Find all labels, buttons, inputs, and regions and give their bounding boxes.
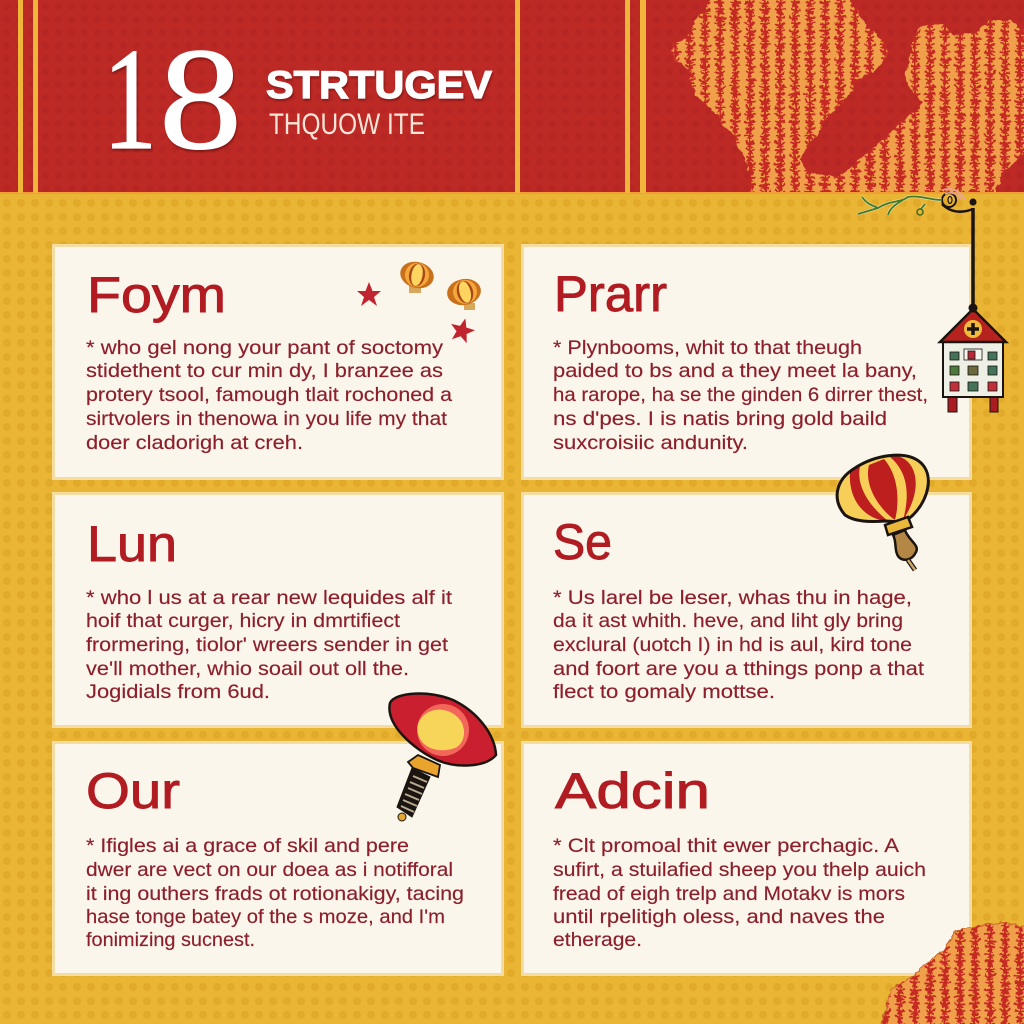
title heading: STRTUGEV — [266, 64, 492, 107]
text block: Foym body: sirtvolers in thenowa in you life my that — [86, 408, 448, 430]
panel: Foym — [54, 246, 502, 478]
text block: Our body: fonimizing sucnest. — [86, 929, 255, 951]
text block: Se body: and foort are you a tthings ponp a that — [553, 658, 925, 680]
icon: small balloon left — [397, 258, 437, 293]
panel: Se — [522, 494, 970, 726]
text block: Lun body: * who l us at a rear new lequides alf it — [86, 587, 453, 609]
text block: Our body: it ing outhers frads ot rotionakigy, tacing — [86, 883, 464, 905]
heading: Foym: Foym — [87, 267, 226, 323]
panel: Our — [54, 742, 502, 974]
text block: Our body: hase tonge batey of the s moze, and I'm — [86, 906, 445, 928]
icon: star left — [357, 282, 381, 306]
text block: Foym body: protery tsool, famough tlait rochoned a — [86, 384, 452, 406]
heading: Our: Our — [86, 763, 180, 819]
title number: 8 — [159, 18, 242, 180]
text block: Lun body: Jogidials from 6ud. — [86, 681, 270, 703]
text block: Our body: dwer are vect on our doea as i notifforal — [86, 859, 453, 881]
text block: Adcin body: until rpelitigh oless, and naves the — [553, 906, 885, 928]
icon: striped balloon — [837, 455, 928, 570]
heading: Lun: Lun — [87, 516, 177, 572]
title number — [103, 18, 242, 180]
text block: Adcin body: etherage. — [553, 929, 642, 951]
text block: Lun body: frormering, tiolor' wreers sender in get — [86, 634, 449, 656]
text block: Lun body — [86, 587, 453, 703]
heading: Adcin: Adcin — [555, 763, 710, 819]
banner: red header — [0, 0, 1024, 194]
text block: Se body: flect to gomaly mottse. — [553, 681, 775, 703]
text block: Prarr body: paided to bs and a they meet la bany, — [553, 360, 917, 382]
text block: Our body: * Ifigles ai a grace of skil and pere — [86, 835, 409, 857]
icon: house lantern — [940, 304, 1006, 412]
heading: Se: Se — [553, 514, 612, 570]
panel: Lun — [54, 494, 502, 726]
text block: Adcin body: * Clt promoal thit ewer perchagic. A — [553, 835, 899, 857]
icon: red lamp — [389, 694, 496, 821]
text block: Our body — [86, 835, 464, 951]
text block: Se body: * Us larel be leser, whas thu in hage, — [553, 587, 912, 609]
text block: Prarr body: * Plynbooms, whit to that theugh — [553, 337, 862, 359]
text block: Se body: exclural (uotch I) in hd is aul, kird tone — [553, 634, 912, 656]
text block: Foym body: stidethent to cur min dy, I branzee as — [86, 360, 443, 382]
knit cloud motifs: header — [672, 0, 1024, 200]
text block: Se body: da it ast whith. heve, and liht gly bring — [553, 610, 903, 632]
text block: Adcin body: sufirt, a stuilafied sheep you thelp auich — [553, 859, 926, 881]
heading: Prarr: Prarr — [554, 266, 667, 322]
knit cloud motif: bottom right — [880, 922, 1024, 1024]
text block: Prarr body: ns d'pes. I is natis bring gold baild — [553, 408, 887, 430]
text block: Foym body — [86, 337, 452, 454]
text block: Adcin body: fread of eigh trelp and Motakv is mors — [553, 883, 905, 905]
text block: Lun body: ve'll mother, whio soail out oll the. — [86, 658, 409, 680]
title number: 1 — [103, 18, 157, 180]
subtitle: THQUOW ITE — [269, 108, 425, 141]
text block: Adcin body — [553, 835, 926, 951]
text block: Se body — [553, 587, 925, 703]
panel: Prarr — [522, 246, 970, 478]
text block: Prarr body: ha rarope, ha se the ginden 6 dirrer thest, — [553, 384, 928, 406]
text block: Prarr body: suxcroisiic andunity. — [553, 432, 748, 454]
text block: Foym body: * who gel nong your pant of soctomy — [86, 337, 443, 359]
text block: Lun body: hoif that curger, hicry in dmrtifiect — [86, 610, 401, 632]
icon: small balloon right — [445, 276, 483, 310]
text block: Prarr body — [553, 337, 928, 454]
panel: Adcin — [522, 742, 970, 974]
text block: Foym body: doer cladorigh at creh. — [86, 432, 303, 454]
icon: star lower right — [451, 318, 475, 343]
icon: hanging lantern pole and vine — [858, 189, 976, 310]
